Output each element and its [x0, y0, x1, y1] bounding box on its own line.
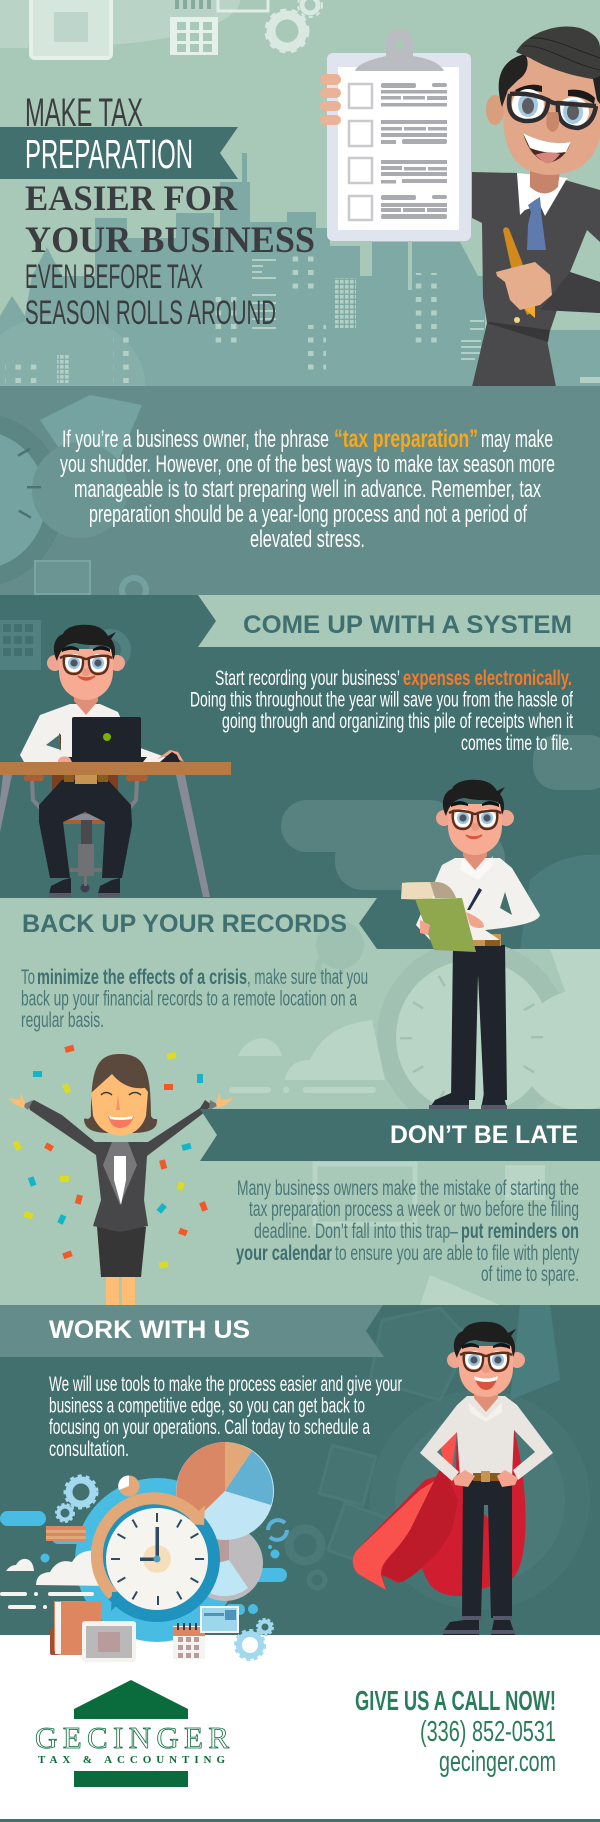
body text — [236, 1176, 579, 1286]
body text: To — [21, 965, 35, 989]
illustration: woman celebrating with confetti — [8, 1045, 233, 1305]
illustration: man writing on clipboard — [401, 780, 540, 1109]
logo: TAX & ACCOUNTING — [38, 1754, 225, 1766]
heading: BACK UP YOUR RECORDS — [22, 910, 347, 938]
panel: back up your records — [0, 898, 600, 1305]
title — [0, 91, 315, 332]
body text: , make sure that you — [247, 965, 368, 989]
body text: business a competitive edge, so you can get back to — [49, 1394, 365, 1418]
panel: work with us — [0, 1305, 600, 1635]
panel: intro — [0, 386, 600, 602]
light gears — [236, 1619, 273, 1660]
logo — [35, 1680, 229, 1787]
calendar — [173, 1623, 205, 1659]
body text: back up your financial records to a remote location on a — [21, 986, 357, 1010]
decorative background devices clock gears — [289, 1305, 590, 1610]
panel: header background — [0, 0, 600, 386]
heading: DON’T BE LATE — [390, 1121, 578, 1149]
panel: intro: “tax preparation” — [334, 425, 478, 453]
call to action text — [355, 1685, 556, 1778]
clock — [97, 1498, 214, 1616]
body text: focusing on your operations. Call today to schedule a — [49, 1415, 370, 1439]
panel: intro: may make — [481, 426, 553, 453]
illustration: man at desk with laptop — [0, 625, 231, 897]
confetti pieces — [13, 1045, 208, 1269]
body text: deadline. Don’t fall into this trap– — [254, 1219, 458, 1243]
illustration: main businessman with glasses and pen — [472, 27, 600, 387]
illustration: city skyline — [0, 153, 600, 455]
icon: clipboard with checklist — [320, 30, 471, 241]
body text: Start recording your business’ — [215, 666, 400, 690]
illustration: clock with pie charts and office icons — [0, 1442, 287, 1662]
panel: don't be late — [200, 1109, 600, 1286]
gears — [56, 1476, 97, 1522]
banner: title ribbon — [0, 127, 238, 179]
title: EASIER FOR — [25, 178, 238, 218]
body text: minimize the effects of a crisis — [37, 965, 247, 989]
body text: regular basis. — [21, 1008, 104, 1032]
banner: heading ribbon — [200, 1109, 600, 1161]
small pie icon — [118, 1475, 140, 1496]
folder — [50, 1601, 101, 1655]
title: MAKE TAX — [25, 91, 143, 135]
title: YOUR BUSINESS — [25, 220, 315, 261]
panel: footer — [0, 1635, 600, 1822]
grey pie chart — [187, 1525, 263, 1601]
decorative clock in intro background — [0, 395, 146, 602]
heading: WORK WITH US — [49, 1316, 250, 1344]
logo: GECINGER — [35, 1720, 229, 1755]
banner: heading ribbon — [0, 1305, 384, 1357]
body text: We will use tools to make the process easier and give your — [49, 1372, 402, 1396]
body text: your calendar — [236, 1241, 332, 1265]
decorative clock clouds background — [229, 921, 600, 1305]
panel: come up with a system — [0, 595, 600, 950]
icons: top decorations tablet calendar gears — [31, 0, 322, 58]
panel: intro: elevated stress. — [250, 526, 365, 553]
body text: consultation. — [49, 1437, 129, 1461]
body text — [21, 965, 368, 1032]
card — [201, 1607, 238, 1632]
server stack icon — [46, 1526, 86, 1541]
title: PREPARATION — [25, 131, 193, 177]
body text — [190, 666, 573, 755]
title: EVEN BEFORE TAX — [25, 258, 203, 296]
title: SEASON ROLLS AROUND — [25, 294, 276, 332]
illustration: superhero man with red cape — [353, 1322, 553, 1635]
speed lines — [0, 1592, 94, 1609]
colored pie chart — [176, 1442, 274, 1540]
decorative background clouds and calendar — [0, 620, 600, 950]
refresh arrows icon — [268, 1520, 287, 1540]
tablet — [82, 1621, 136, 1662]
banner: heading ribbon — [198, 595, 600, 647]
heading: COME UP WITH A SYSTEM — [243, 611, 572, 639]
clouds — [6, 1559, 34, 1571]
body text — [49, 1372, 402, 1461]
panel: intro: If you’re a business owner, the phrase — [62, 426, 329, 453]
